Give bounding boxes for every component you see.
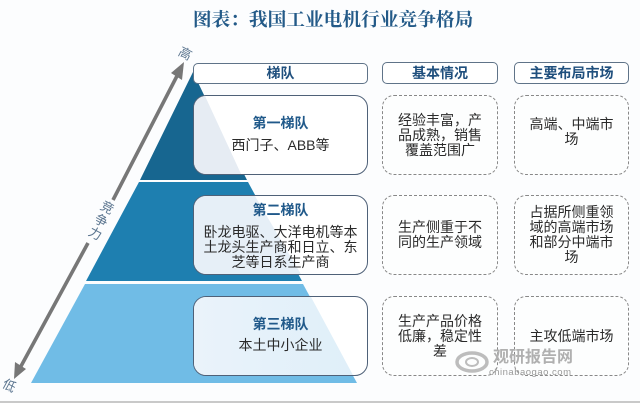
tier 2 description: 土龙头生产商和日立、东 <box>204 239 358 255</box>
tier 2 description: 卧龙电驱、大洋电机等本 <box>204 224 358 240</box>
tier 2 basic situation: 生产侧重于不 <box>398 219 482 235</box>
axis label: competitiveness: 竞 <box>98 198 116 217</box>
tier 2 main markets <box>514 195 629 275</box>
tier 3 basic situation: 差 <box>433 342 447 358</box>
panel: tier 3 <box>193 296 368 376</box>
tier 2 description: 芝等日系生产商 <box>232 254 330 270</box>
tier 1 description: 西门子、ABB等 <box>231 137 330 153</box>
watermark url: chinabaogao.com <box>489 367 572 378</box>
panel: tier 1 <box>193 95 368 175</box>
tier 2 description <box>204 224 358 270</box>
column header: tier: 梯队 <box>266 65 294 81</box>
watermark <box>455 348 573 378</box>
axis label: high: 高 <box>176 44 194 63</box>
tier 3 main markets <box>514 296 629 376</box>
tier 2 basic situation: 同的生产领域 <box>398 234 482 250</box>
arrow: competitiveness up <box>113 62 184 200</box>
tier 1 basic situation: 品成熟，销售 <box>398 126 482 142</box>
axis label: competitiveness: 力 <box>86 224 104 243</box>
arrow: competitiveness down <box>14 243 88 379</box>
column header: basic situation <box>382 62 498 84</box>
panel: tier 2 <box>193 195 368 275</box>
tier 3 main markets: 主攻低端市场 <box>530 328 614 344</box>
tier 1 main markets: 高端、中端市 <box>530 116 614 132</box>
tier 1 heading: 第一梯队 <box>252 115 308 131</box>
tier 1 basic situation <box>382 95 498 175</box>
tier 1 main markets: 场 <box>564 131 578 147</box>
column header: main markets: 主要布局市场 <box>530 65 614 81</box>
axis label: low: 低 <box>0 376 18 395</box>
pyramid tier 3 <box>31 284 357 383</box>
pyramid tier 1 <box>140 72 247 180</box>
watermark name: 观研报告网 <box>493 349 573 366</box>
tier 2 heading: 第二梯队 <box>252 202 308 218</box>
tier 3 description: 本土中小企业 <box>238 337 322 353</box>
title: 图表：我国工业电机行业竞争格局 <box>193 10 473 31</box>
tier 1 basic situation: 覆盖范围广 <box>405 142 475 158</box>
tier 3 heading: 第三梯队 <box>252 316 308 332</box>
column header: basic situation: 基本情况 <box>412 65 468 81</box>
bottom rule <box>0 401 640 403</box>
column header: main markets <box>514 62 629 84</box>
tier 2 main markets: 场 <box>564 249 578 265</box>
tier 2 main markets: 占据所侧重领 <box>530 204 614 220</box>
column header: tier <box>193 63 368 84</box>
tier 3 basic situation: 低廉，稳定性 <box>398 328 482 344</box>
axis label: competitiveness: 争 <box>92 211 110 230</box>
axis label: competitiveness <box>86 198 116 243</box>
watermark logo <box>455 351 489 373</box>
tier 3 basic situation: 生产产品价格 <box>398 312 482 328</box>
tier 3 basic situation <box>382 296 498 376</box>
tier 1 basic situation: 经验丰富，产 <box>398 112 482 128</box>
tier 2 main markets: 域的高端市场 <box>530 219 614 235</box>
tier 1 main markets <box>514 95 629 175</box>
pyramid tier 2 <box>86 182 302 281</box>
tier 2 basic situation <box>382 195 498 275</box>
tier 2 main markets: 和部分中端市 <box>530 234 614 250</box>
